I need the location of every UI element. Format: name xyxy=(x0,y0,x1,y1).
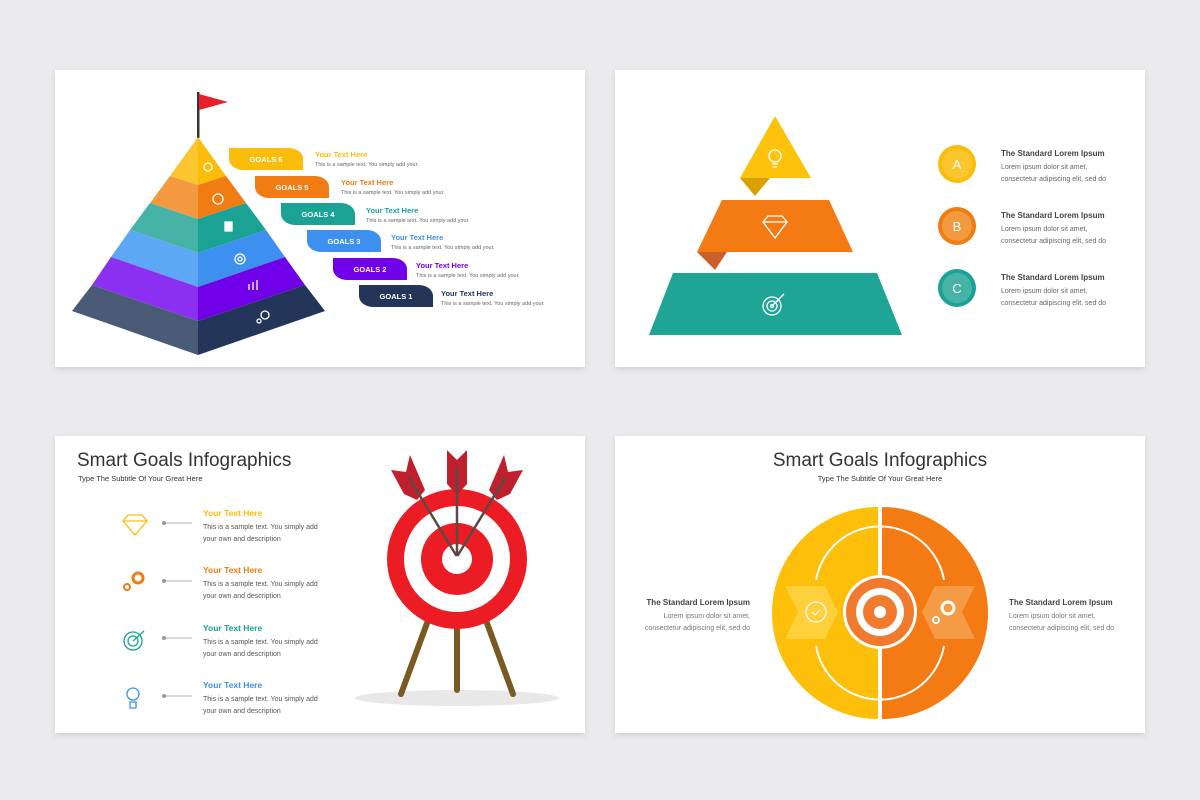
goal texts: Your Text Here xyxy=(366,206,418,215)
goal tabs: GOALS 1 xyxy=(380,292,412,301)
side texts: consectetur adipiscing elit, sed do xyxy=(1009,625,1114,632)
list A B C: B xyxy=(953,219,961,234)
list items: Your Text Here xyxy=(203,680,262,690)
goal texts: This is a sample text. You simply add your. xyxy=(441,301,545,307)
goal tabs: GOALS 3 xyxy=(328,237,360,246)
goal tabs: GOALS 4 xyxy=(302,210,335,219)
heading: Type The Subtitle Of Your Great Here xyxy=(78,474,203,483)
target with darts xyxy=(355,450,559,706)
heading: Type The Subtitle Of Your Great Here xyxy=(818,474,942,483)
heading: Smart Goals Infographics xyxy=(77,450,291,471)
goal texts: This is a sample text. You simply add your. xyxy=(391,245,495,251)
goal texts: Your Text Here xyxy=(315,150,367,159)
list A B C: Lorem ipsum dolor sit amet, xyxy=(1001,226,1087,233)
panel: circular target xyxy=(615,436,1145,733)
icon: flag xyxy=(197,92,228,138)
list A B C: consectetur adipiscing elit, sed do xyxy=(1001,300,1106,307)
panel: three-level pyramid xyxy=(615,70,1145,367)
goal texts: This is a sample text. You simply add your. xyxy=(366,218,470,224)
list A B C: The Standard Lorem Ipsum xyxy=(1001,211,1105,220)
side texts: The Standard Lorem Ipsum xyxy=(646,598,750,607)
list items: your own and description xyxy=(203,651,281,658)
heading xyxy=(77,450,291,483)
list items: Your Text Here xyxy=(203,508,262,518)
goal texts: This is a sample text. You simply add your. xyxy=(341,190,445,196)
list A B C xyxy=(938,145,1106,307)
side texts: The Standard Lorem Ipsum xyxy=(1009,598,1113,607)
list A B C: A xyxy=(953,157,962,172)
list A B C: consectetur adipiscing elit, sed do xyxy=(1001,238,1106,245)
list items: This is a sample text. You simply add xyxy=(203,639,318,646)
heading: Smart Goals Infographics xyxy=(773,450,987,471)
goal texts: This is a sample text. You simply add your. xyxy=(416,273,520,279)
goal tabs: GOALS 5 xyxy=(276,183,308,192)
list items: your own and description xyxy=(203,593,281,600)
side texts xyxy=(645,598,1114,632)
pyramid xyxy=(72,137,325,355)
list items: This is a sample text. You simply add xyxy=(203,524,318,531)
goal texts: Your Text Here xyxy=(441,289,493,298)
goal tabs: GOALS 6 xyxy=(250,155,282,164)
goal texts: Your Text Here xyxy=(416,261,468,270)
goal texts xyxy=(315,150,545,307)
side texts: Lorem ipsum dolor sit amet, xyxy=(1009,613,1095,620)
list A B C: The Standard Lorem Ipsum xyxy=(1001,149,1105,158)
list items: This is a sample text. You simply add xyxy=(203,581,318,588)
list A B C: C xyxy=(952,281,962,296)
goal tabs: GOALS 2 xyxy=(354,265,386,274)
goal texts: Your Text Here xyxy=(341,178,393,187)
list items xyxy=(123,508,318,715)
list items: This is a sample text. You simply add xyxy=(203,696,318,703)
heading xyxy=(773,450,987,483)
list items: your own and description xyxy=(203,536,281,543)
list A B C: The Standard Lorem Ipsum xyxy=(1001,273,1105,282)
side texts: consectetur adipiscing elit, sed do xyxy=(645,625,750,632)
circle chart xyxy=(772,507,988,719)
list items: Your Text Here xyxy=(203,565,262,575)
list items: your own and description xyxy=(203,708,281,715)
goal texts: This is a sample text. You simply add your. xyxy=(315,162,419,168)
goal texts: Your Text Here xyxy=(391,233,443,242)
panel: dartboard xyxy=(55,436,585,733)
list A B C: consectetur adipiscing elit, sed do xyxy=(1001,176,1106,183)
list A B C: Lorem ipsum dolor sit amet, xyxy=(1001,164,1087,171)
side texts: Lorem ipsum dolor sit amet, xyxy=(664,613,750,620)
panel: pyramid goals xyxy=(55,70,585,367)
list A B C: Lorem ipsum dolor sit amet, xyxy=(1001,288,1087,295)
pyramid levels xyxy=(649,116,902,335)
list items: Your Text Here xyxy=(203,623,262,633)
goal tabs xyxy=(229,148,433,307)
